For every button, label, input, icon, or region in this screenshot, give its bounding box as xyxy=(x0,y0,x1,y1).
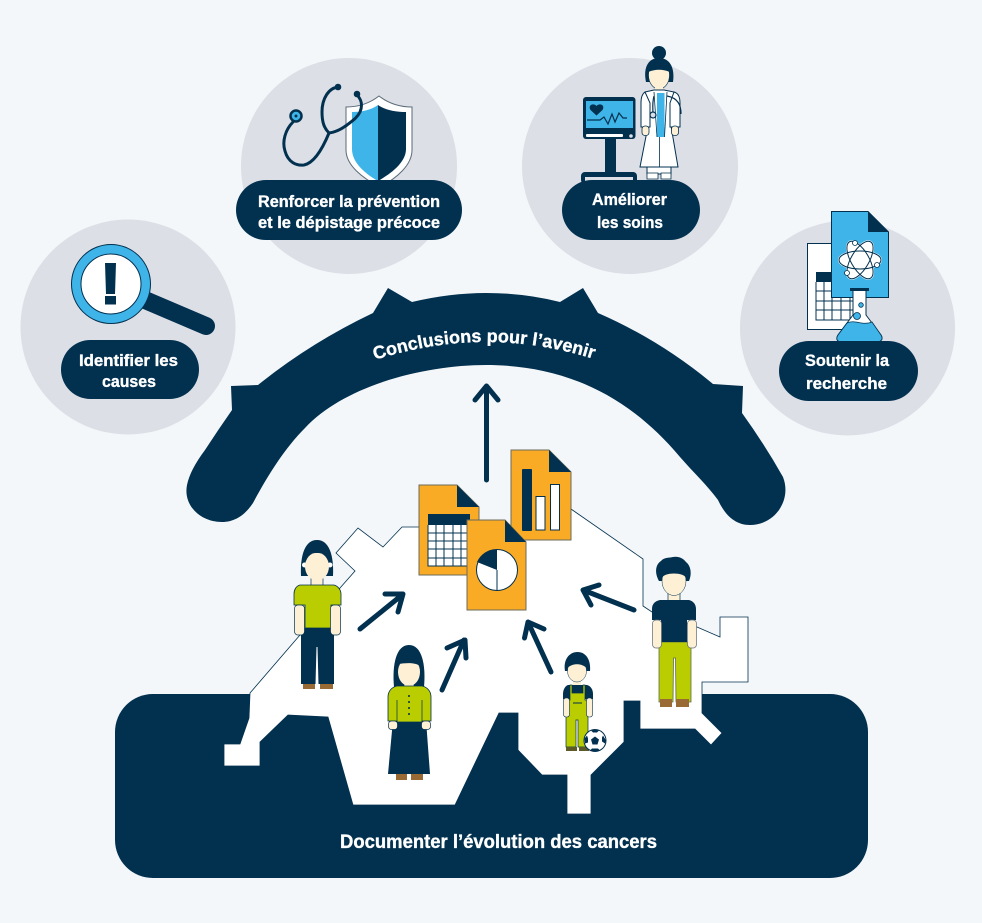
icon: stethoscope xyxy=(284,85,361,165)
panel: améliorer les soins xyxy=(522,46,738,274)
label pill: identifier les causes: Identifier les xyxy=(79,352,178,370)
label pill: soutenir la recherche xyxy=(779,341,918,401)
arch: conclusions pour l'avenir: Conclusions pour l’avenir xyxy=(373,330,596,358)
icon: medical monitor xyxy=(581,97,637,184)
person: woman with long skirt xyxy=(388,645,431,780)
icon: flask xyxy=(837,288,882,342)
arrow: man to documents xyxy=(583,585,634,610)
arrow: child to documents xyxy=(524,622,551,672)
person: woman with green shirt xyxy=(294,540,341,689)
icon: shield xyxy=(346,96,412,187)
document: pie chart xyxy=(467,520,526,610)
label pill: identifier les causes: causes xyxy=(102,373,156,391)
icon: table document xyxy=(808,244,862,330)
panel: identifier les causes xyxy=(20,220,236,434)
label pill: renforcer la prévention: Renforcer la prévention xyxy=(258,193,440,211)
panel: renforcer la prévention xyxy=(236,58,462,274)
label pill: soutenir la recherche: recherche xyxy=(806,375,887,393)
panel: soutenir la recherche xyxy=(740,212,955,436)
icon: doctor xyxy=(640,46,681,179)
map of Switzerland xyxy=(224,509,748,814)
panel: documenter l'évolution des cancers xyxy=(115,694,868,878)
icon: magnifying glass xyxy=(72,244,206,326)
document: table xyxy=(419,485,479,575)
arch: conclusions pour l'avenir xyxy=(186,288,786,525)
label pill: renforcer la prévention: et le dépistage précoce xyxy=(258,214,440,232)
arrow: woman with skirt to documents xyxy=(442,640,466,690)
arrow: woman to documents xyxy=(360,594,403,629)
person: child with football xyxy=(563,652,606,752)
icon: atom document xyxy=(832,212,888,298)
panel: documenter l'évolution des cancers: Documenter l’évolution des cancers xyxy=(340,832,657,853)
label pill: améliorer les soins: les soins xyxy=(597,214,663,232)
person: man with navy shirt xyxy=(652,557,696,707)
label pill: soutenir la recherche: Soutenir la xyxy=(805,352,890,370)
label pill: renforcer la prévention xyxy=(236,180,462,240)
icon: football xyxy=(584,730,606,752)
label pill: identifier les causes xyxy=(61,340,199,399)
document: bar chart xyxy=(511,450,571,540)
label pill: améliorer les soins xyxy=(562,180,700,240)
arrow: up to conclusions xyxy=(475,386,498,480)
label pill: améliorer les soins: Améliorer xyxy=(592,191,668,209)
